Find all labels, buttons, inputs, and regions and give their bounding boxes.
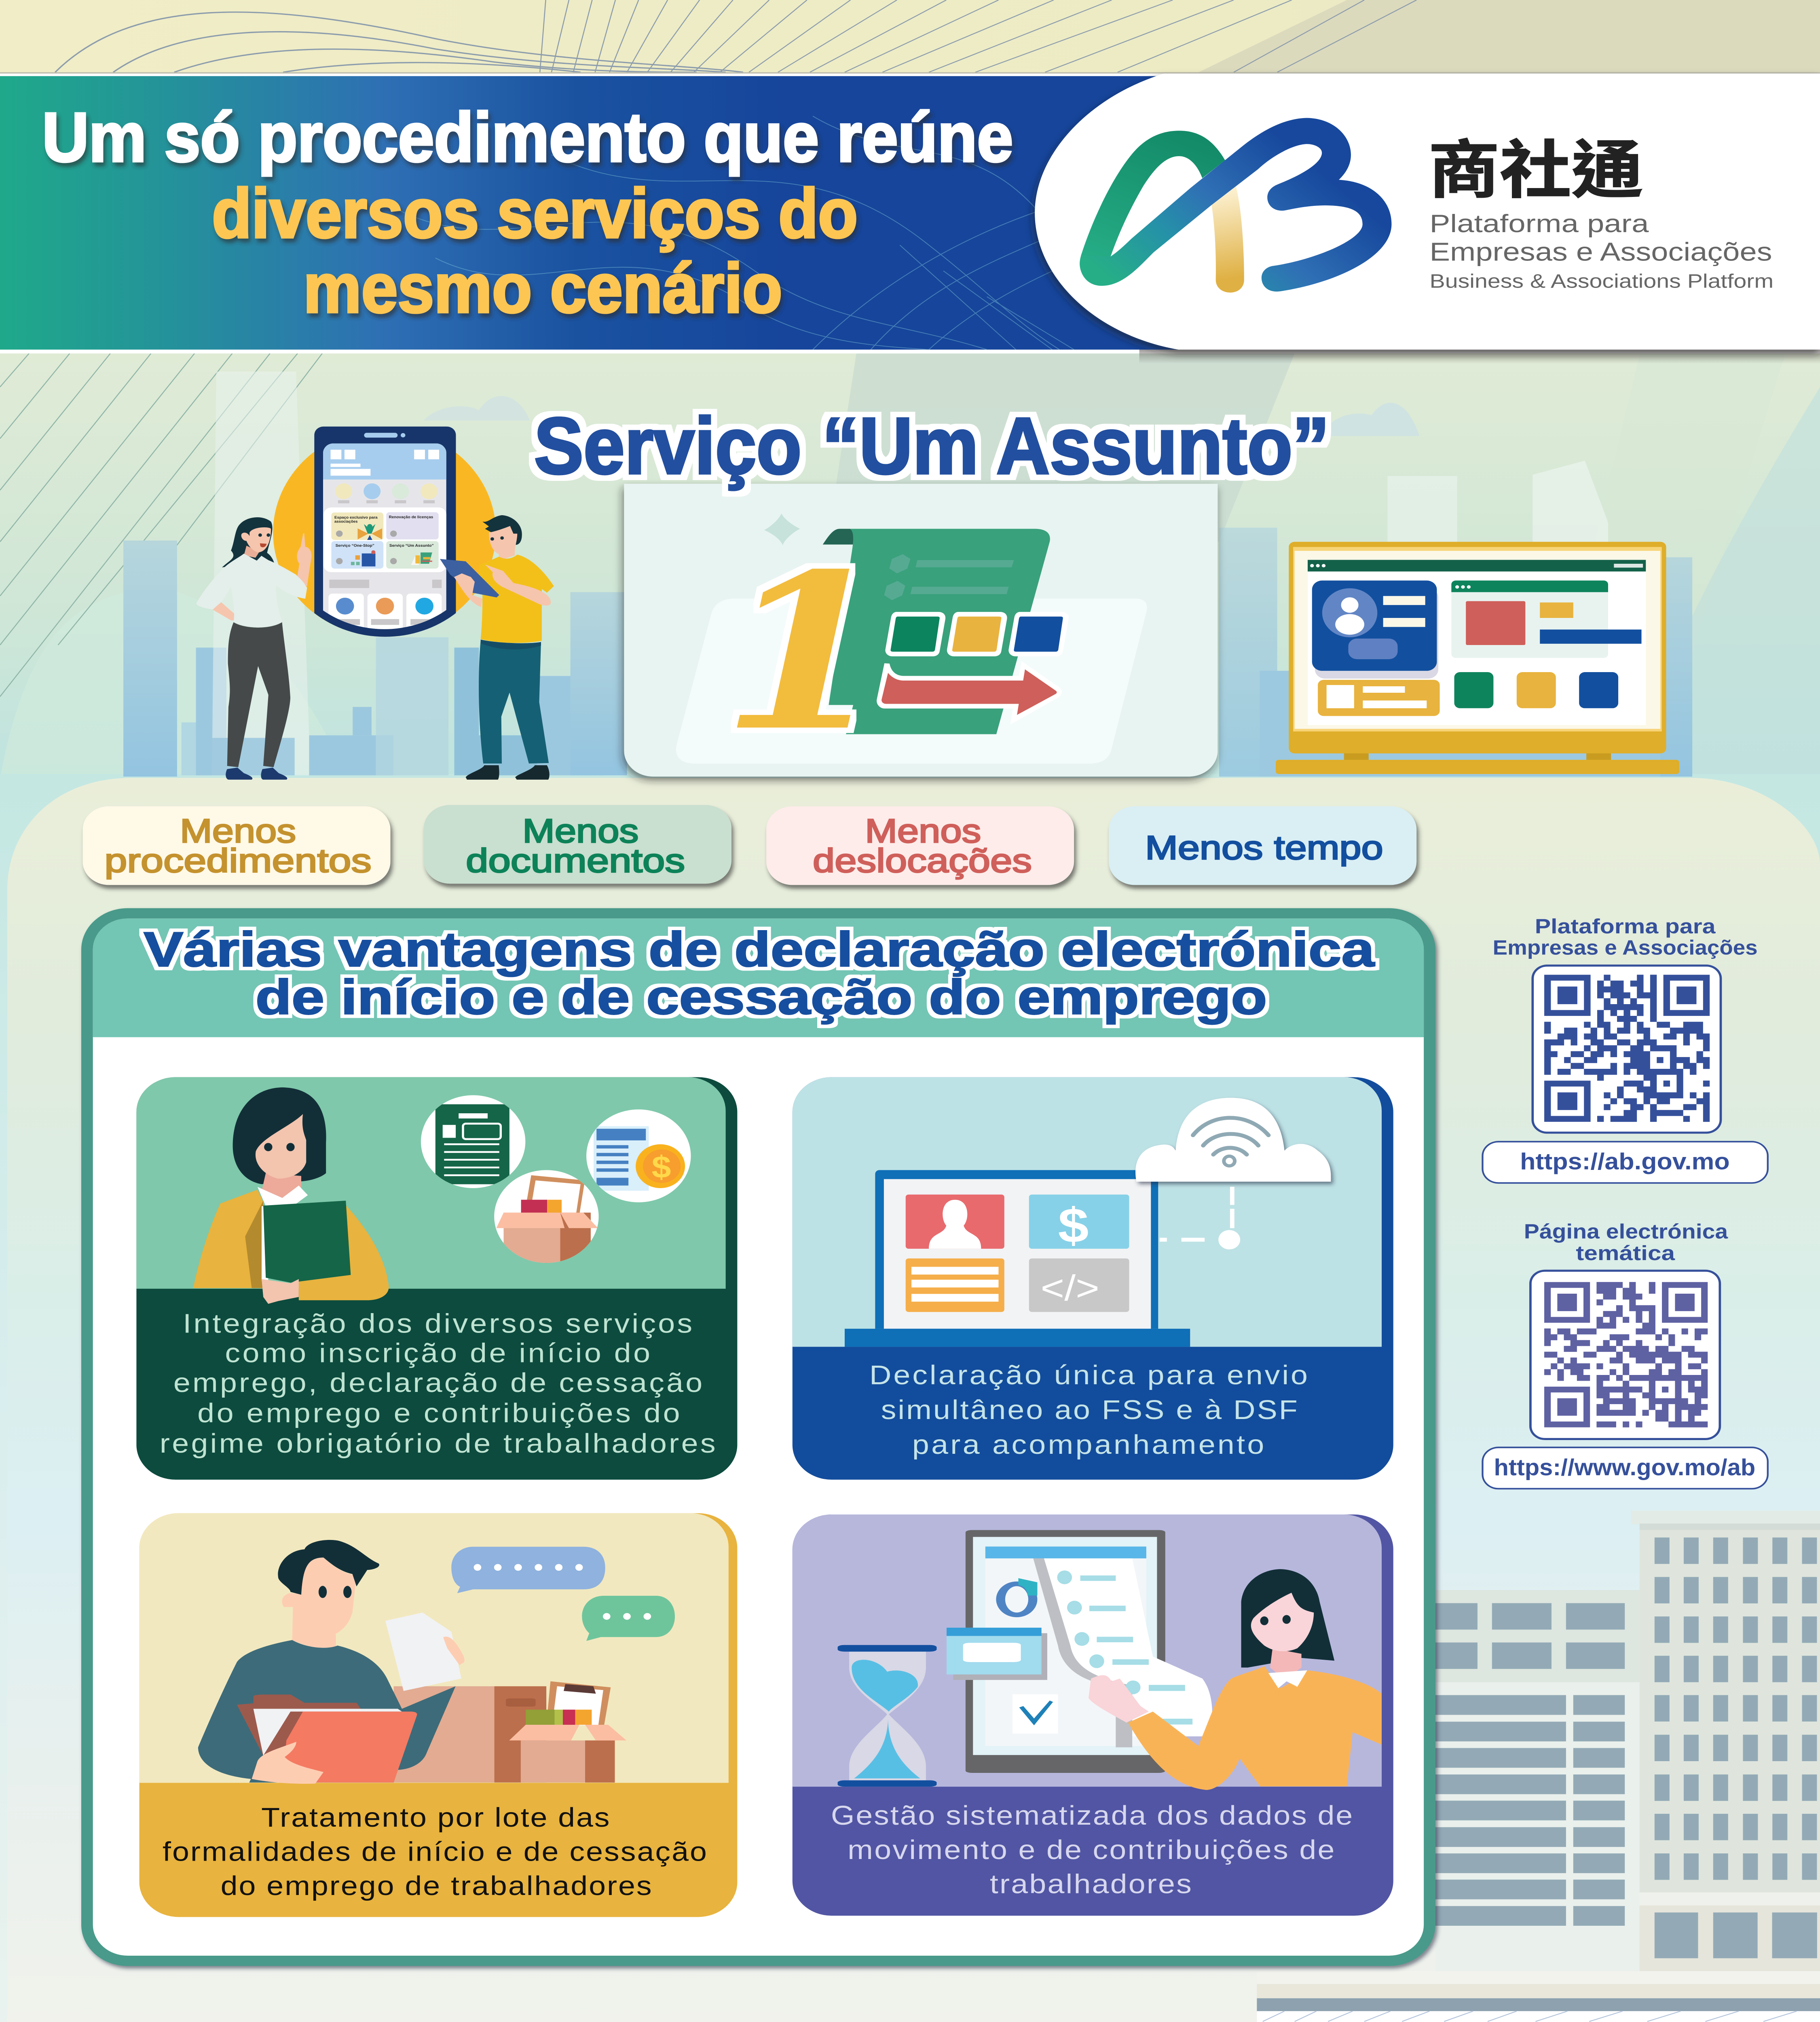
card 4 text: Gestão sistematizada dos dados de (831, 1800, 1353, 1831)
QR label: platform: Plataforma para (1535, 915, 1716, 938)
section title: Serviço Um Assunto: Serviço “Um Assunto” (534, 401, 1330, 491)
benefit pill: Menos procedimentos: procedimentos (104, 842, 372, 879)
URL pill: www.gov.mo/ab: https://www.gov.mo/ab (1494, 1454, 1755, 1480)
icon: speech bubbles (451, 1547, 675, 1641)
logo white panel (1035, 74, 1820, 349)
card 3: batch processing (140, 1513, 737, 1917)
icon: phone with yellow circle: Renovação de licenças (389, 515, 433, 519)
panel title (144, 922, 1375, 1025)
banner title: mesmo cenário (303, 249, 782, 327)
logo wordmark: 商社通 (1428, 119, 1643, 210)
illustration: display board (1276, 542, 1679, 774)
icon: tiles and arrow (877, 612, 1069, 725)
icon: phone with yellow circle: associações (334, 520, 357, 523)
URL pill: www.gov.mo/ab (1482, 1447, 1768, 1489)
card 1 text: Integração dos diversos serviços (183, 1308, 692, 1339)
card 1 text (160, 1308, 716, 1459)
main advantages panel (87, 914, 1429, 1961)
header banner (0, 72, 1820, 364)
icon: box and clipboard circle (494, 1170, 599, 1264)
icon: man with tablet (440, 515, 554, 780)
banner title: diversos serviços do (212, 174, 858, 252)
connector dashes (1160, 1187, 1240, 1250)
decorative line pattern, upper left of sky (0, 353, 322, 697)
icon: document circle (421, 1095, 525, 1188)
card 2: single declaration (793, 1077, 1393, 1480)
banner title: Um só procedimento que reúne (42, 98, 1013, 176)
logo wordmark (1428, 119, 1773, 292)
icon: phone with yellow circle: Serviço “One-Stop” (336, 544, 374, 548)
benefit pill: Menos deslocações: Menos (865, 812, 981, 850)
URL pill: ab.gov.mo (1482, 1142, 1768, 1183)
benefit pill: Menos tempo: Menos tempo (1145, 829, 1383, 866)
card 1 text: como inscrição de início do (225, 1338, 650, 1368)
icon: laptop with tiles: $ (1058, 1198, 1089, 1253)
card 4: systematised data management (793, 1514, 1393, 1916)
logo wordmark: Business & Associations Platform (1429, 270, 1773, 292)
icon: laptop with tiles (845, 1170, 1190, 1347)
card 2 text: Declaração única para envio (869, 1360, 1308, 1390)
benefit pill: Menos procedimentos (83, 806, 391, 885)
panel title: Várias vantagens de declaração electrónica (144, 922, 1375, 977)
QR code: thematic page (1530, 1271, 1720, 1439)
icon: woman presenting (1089, 1569, 1381, 1790)
big number 1: 1 (721, 527, 889, 778)
icon: tablet with dashboard (947, 1530, 1212, 1773)
card 3 text (163, 1802, 707, 1901)
logo wordmark: Plataforma para (1429, 210, 1649, 238)
card 1 text: emprego, declaração de cessação (173, 1368, 702, 1398)
card 4 text (831, 1800, 1353, 1899)
cityscape background (123, 372, 1692, 776)
QR code: platform (1533, 966, 1721, 1133)
icon: wifi cloud (1135, 1098, 1331, 1182)
icon: woman pointing at phone (196, 517, 312, 780)
card 2 text: simultâneo ao FSS e à DSF (881, 1395, 1298, 1425)
card 1 text: do emprego e contribuições do (197, 1398, 680, 1428)
icon: green scroll (764, 514, 1050, 734)
banner title (42, 98, 1013, 327)
logo wordmark: Empresas e Associações (1429, 238, 1772, 266)
benefit pill: Menos procedimentos: Menos (180, 812, 296, 850)
benefit pill: Menos tempo (1109, 806, 1416, 885)
card 4 text: trabalhadores (990, 1869, 1192, 1899)
icon: invoice and coin circle (586, 1109, 691, 1202)
icon: boxes and clipboard (394, 1681, 626, 1783)
card 2 text (869, 1360, 1308, 1460)
URL pill: ab.gov.mo: https://ab.gov.mo (1520, 1148, 1730, 1174)
benefit pill: Menos documentos (424, 805, 731, 884)
icon: phone with yellow circle (273, 427, 496, 637)
card 3 text: formalidades de início e de cessação (163, 1836, 707, 1867)
icon: laptop with tiles: </> (1041, 1268, 1099, 1308)
icon: man reading document (198, 1540, 465, 1784)
benefit pill: Menos deslocações (766, 806, 1074, 885)
center card (624, 484, 1218, 776)
QR label: platform (1493, 915, 1758, 959)
logo AB mark (1080, 118, 1391, 292)
panel title: de início e de cessação do emprego (256, 970, 1267, 1025)
QR label: thematic page: Página electrónica (1524, 1220, 1728, 1243)
card 1 text: regime obrigatório de trabalhadores (160, 1428, 716, 1459)
right buildings (1257, 1510, 1820, 2022)
decorative line pattern, top strip (55, 0, 1416, 72)
icon: phone with yellow circle: Espaço exclusivo para (334, 516, 378, 520)
card 3 text: do emprego de trabalhadores (221, 1871, 652, 1901)
icon: invoice and coin circle: $ (652, 1150, 671, 1184)
benefit pill: Menos documentos: documentos (466, 842, 685, 879)
card 2 text: para acompanhamento (912, 1430, 1264, 1460)
icon: woman with folder (193, 1087, 389, 1304)
lower pale hill panel (7, 778, 1820, 2022)
QR label: platform: Empresas e Associações (1493, 936, 1758, 959)
QR label: thematic page: temática (1576, 1242, 1675, 1265)
card 4 text: movimento e de contribuições de (848, 1835, 1334, 1865)
icon: hourglass (838, 1645, 936, 1787)
card 1: integration of services (136, 1077, 737, 1480)
icon: phone with yellow circle: Serviço “Um Assunto” (389, 544, 434, 548)
benefit pill: Menos deslocações: deslocações (813, 842, 1032, 879)
QR label: thematic page (1524, 1220, 1728, 1265)
illustration: phone, woman and man (196, 427, 554, 780)
card 3 text: Tratamento por lote das (261, 1802, 610, 1833)
benefit pill: Menos documentos: Menos (522, 812, 638, 850)
